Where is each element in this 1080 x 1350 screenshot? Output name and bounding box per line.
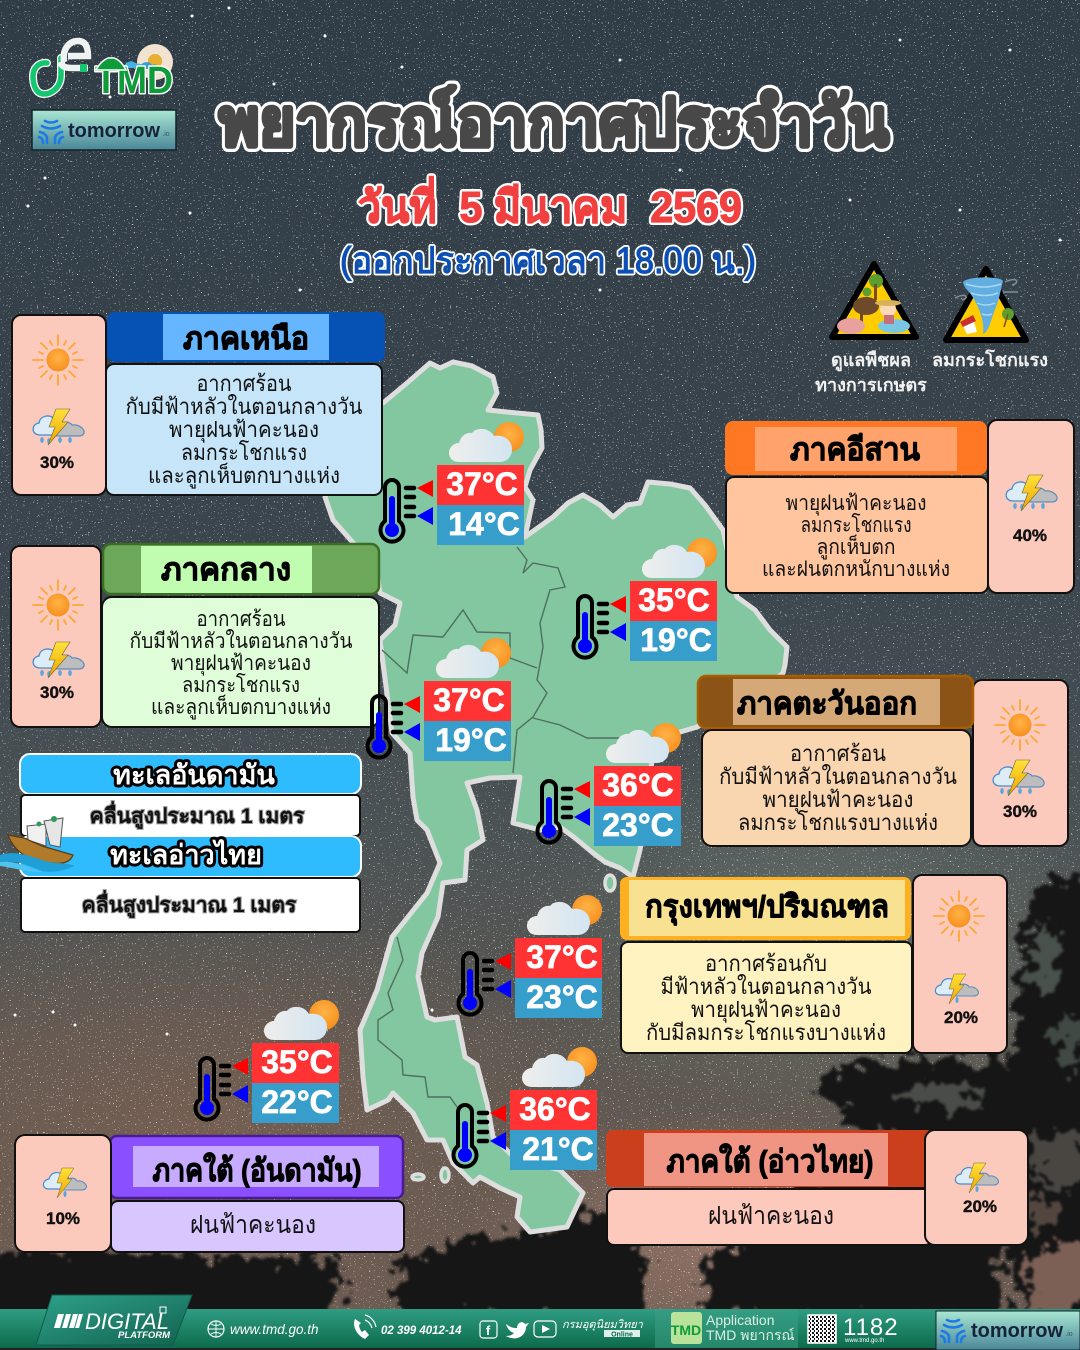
- panel: central: [11, 544, 379, 727]
- panel: south andaman: ภาคใต้ (อันดามัน): [152, 1152, 362, 1188]
- panel: east: พายุฝนฟ้าคะนอง: [762, 787, 914, 813]
- footer: QR code and 1182: 1182: [843, 1314, 899, 1341]
- panel: northeast: ลูกเห็บตก: [816, 533, 896, 560]
- panel: south gulf: 20%: [963, 1197, 997, 1216]
- footer bar: [0, 1295, 1080, 1350]
- temperature: central 37/19: 19°C: [435, 722, 507, 758]
- panel: central: ภาคกลาง: [161, 552, 291, 587]
- panel: bangkok and vicinity: อากาศร้อนกับ: [705, 951, 827, 976]
- panel: bangkok and vicinity: พายุฝนฟ้าคะนอง: [691, 997, 841, 1023]
- background: tree silhouettes: [0, 880, 1080, 1320]
- panel: south gulf: ภาคใต้ (อ่าวไทย): [666, 1143, 874, 1179]
- temperature: bangkok 37/23: [458, 895, 602, 1018]
- panel: north: 30%: [40, 453, 74, 472]
- footer: QR code and 1182: www.tmd.go.th: [844, 1338, 884, 1344]
- warning label: strong wind: ลมกระโชกแรง: [932, 349, 1048, 370]
- panel: north: พายุฝนฟ้าคะนอง: [169, 417, 319, 443]
- panel: bangkok and vicinity: กรุงเทพฯ/ปริมณฑล: [645, 889, 889, 926]
- panel: east: ภาคตะวันออก: [737, 686, 917, 721]
- temperature: central 37/19: [368, 638, 511, 761]
- panel: north: กับมีฟ้าหลัวในตอนกลางวัน: [126, 394, 362, 419]
- panel: central: ลมกระโชกแรง: [182, 673, 300, 697]
- panel: northeast: และฝนตกหนักบางแห่ง: [762, 558, 950, 581]
- footer bar: www.tmd.go.th: [230, 1322, 319, 1337]
- map of Thailand: [325, 362, 787, 1232]
- panel: east: 30%: [1003, 802, 1037, 821]
- footer bar: 02 399 4012-14: [381, 1325, 462, 1337]
- panel: sea conditions: ทะเลอ่าวไทย: [110, 839, 262, 870]
- panel: sea conditions: คลื่นสูงประมาณ 1 เมตร: [82, 889, 297, 919]
- panel: north: และลูกเห็บตกบางแห่ง: [148, 461, 340, 489]
- panel: east: กับมีฟ้าหลัวในตอนกลางวัน: [719, 764, 957, 789]
- warning label: agriculture: ทางการเกษตร: [815, 375, 927, 395]
- logo: TMD: [95, 44, 173, 102]
- panel: central: และลูกเห็บตกบางแห่ง: [151, 693, 331, 720]
- temperature: south andaman 35/22: [196, 1000, 339, 1123]
- temperature: east 36/23: 36°C: [602, 767, 674, 803]
- panel: south andaman: 10%: [46, 1209, 80, 1228]
- issue time: (ออกประกาศเวลา 18.00 น.): [340, 240, 756, 281]
- temperature: northeast 35/19: [574, 538, 717, 661]
- footer: TMD application: [655, 1309, 798, 1348]
- temperature: south gulf 36/21: 36°C: [519, 1091, 591, 1127]
- panel: bangkok and vicinity: [620, 875, 1007, 1053]
- panel: sea conditions: ทะเลอันดามัน: [113, 760, 275, 790]
- background: lighter gaps in the foliage: [902, 926, 1080, 1310]
- temperature: northeast 35/19: 35°C: [638, 582, 710, 618]
- panel: central: กับมีฟ้าหลัวในตอนกลางวัน: [130, 629, 352, 653]
- temperature: east 36/23: 23°C: [602, 807, 674, 843]
- temperature: north 37/14: [380, 422, 524, 545]
- temperature: east 36/23: [538, 723, 681, 846]
- panel: sea conditions: [20, 754, 361, 932]
- warning icon: crops and agriculture: [832, 264, 916, 337]
- logo: tomorrow.io: .io: [162, 131, 170, 138]
- title: พยากรณ์อากาศประจำวัน: [219, 85, 889, 159]
- temperature: north 37/14: 37°C: [446, 466, 518, 502]
- panel: bangkok and vicinity: 20%: [944, 1008, 978, 1027]
- panel: central: พายุฝนฟ้าคะนอง: [171, 652, 311, 676]
- panel: northeast: ภาคอีสาน: [790, 432, 920, 467]
- footer: TMD application: TMD พยากรณ์: [706, 1327, 795, 1343]
- footer: tomorrow.io logo: .io: [1065, 1331, 1073, 1338]
- panel: northeast: ลมกระโชกแรง: [800, 513, 912, 537]
- issue time: (ออกประกาศเวลา 18.00 น.): [340, 240, 756, 281]
- logo: tomorrow.io: tomorrow: [68, 120, 160, 142]
- temperature: south gulf 36/21: [454, 1047, 597, 1170]
- footer bar: DIGITAL: [85, 1309, 169, 1334]
- temperature: northeast 35/19: 19°C: [640, 622, 712, 658]
- temperature: south andaman 35/22: 35°C: [261, 1044, 333, 1080]
- panel: bangkok and vicinity: มีฟ้าหลัวในตอนกลางวัน: [660, 974, 872, 999]
- footer bar: กรมอุตุนิยมวิทยา: [562, 1319, 644, 1331]
- logo: DE: [33, 41, 88, 94]
- logo: tomorrow.io: [32, 110, 176, 150]
- panel: sea conditions: คลื่นสูงประมาณ 1 เมตร: [90, 800, 305, 830]
- warning icon: strong wind: [946, 269, 1026, 340]
- panel: south andaman: ฝนฟ้าคะนอง: [190, 1211, 316, 1239]
- temperature: south andaman 35/22: 22°C: [261, 1084, 333, 1120]
- footer bar: f: [486, 1323, 491, 1338]
- panel: south gulf: ฝนฟ้าคะนอง: [708, 1202, 834, 1230]
- temperature: bangkok 37/23: 37°C: [526, 939, 598, 975]
- temperature: north 37/14: 14°C: [448, 506, 520, 542]
- panel: northeast: 40%: [1013, 526, 1047, 545]
- temperature: south gulf 36/21: 21°C: [522, 1131, 594, 1167]
- date: วันที่ 5 มีนาคม 2569: [358, 176, 742, 232]
- temperature: bangkok 37/23: 23°C: [526, 979, 598, 1015]
- logo: TMD: TMD: [95, 60, 173, 102]
- panel: north: ภาคเหนือ: [183, 321, 309, 356]
- footer: tomorrow.io logo: tomorrow: [971, 1320, 1063, 1342]
- panel: east: อากาศร้อน: [790, 741, 886, 766]
- date: วันที่ 5 มีนาคม 2569: [358, 176, 742, 232]
- panel: north: อากาศร้อน: [196, 371, 292, 396]
- panel: central: 30%: [40, 683, 74, 702]
- warning label: crops: ดูแลพืชผล: [831, 350, 911, 372]
- panel: south andaman: [15, 1135, 404, 1252]
- panel: central: อากาศร้อน: [196, 608, 286, 631]
- panel: south gulf: [606, 1130, 1028, 1245]
- footer bar: Online: [611, 1332, 633, 1338]
- footer: TMD application: Application: [706, 1312, 774, 1328]
- panel: northeast: พายุฝนฟ้าคะนอง: [786, 492, 926, 516]
- panel: north: ลมกระโชกแรง: [181, 440, 307, 465]
- panel: northeast: [725, 420, 1074, 593]
- panel: north: [12, 312, 385, 495]
- footer: TMD application: TMD: [671, 1322, 701, 1338]
- footer: QR code and 1182: [808, 1314, 899, 1344]
- title: พยากรณ์อากาศประจำวัน: [219, 85, 889, 159]
- icon: ship: [0, 816, 75, 872]
- panel: bangkok and vicinity: กับมีลมกระโชกแรงบางแห่ง: [646, 1020, 886, 1045]
- panel: east: ลมกระโชกแรงบางแห่ง: [738, 810, 938, 835]
- panel: east: [698, 676, 1068, 846]
- temperature: central 37/19: 37°C: [433, 682, 505, 718]
- footer: tomorrow.io logo: [936, 1311, 1080, 1350]
- footer bar: PLATFORM: [118, 1330, 171, 1341]
